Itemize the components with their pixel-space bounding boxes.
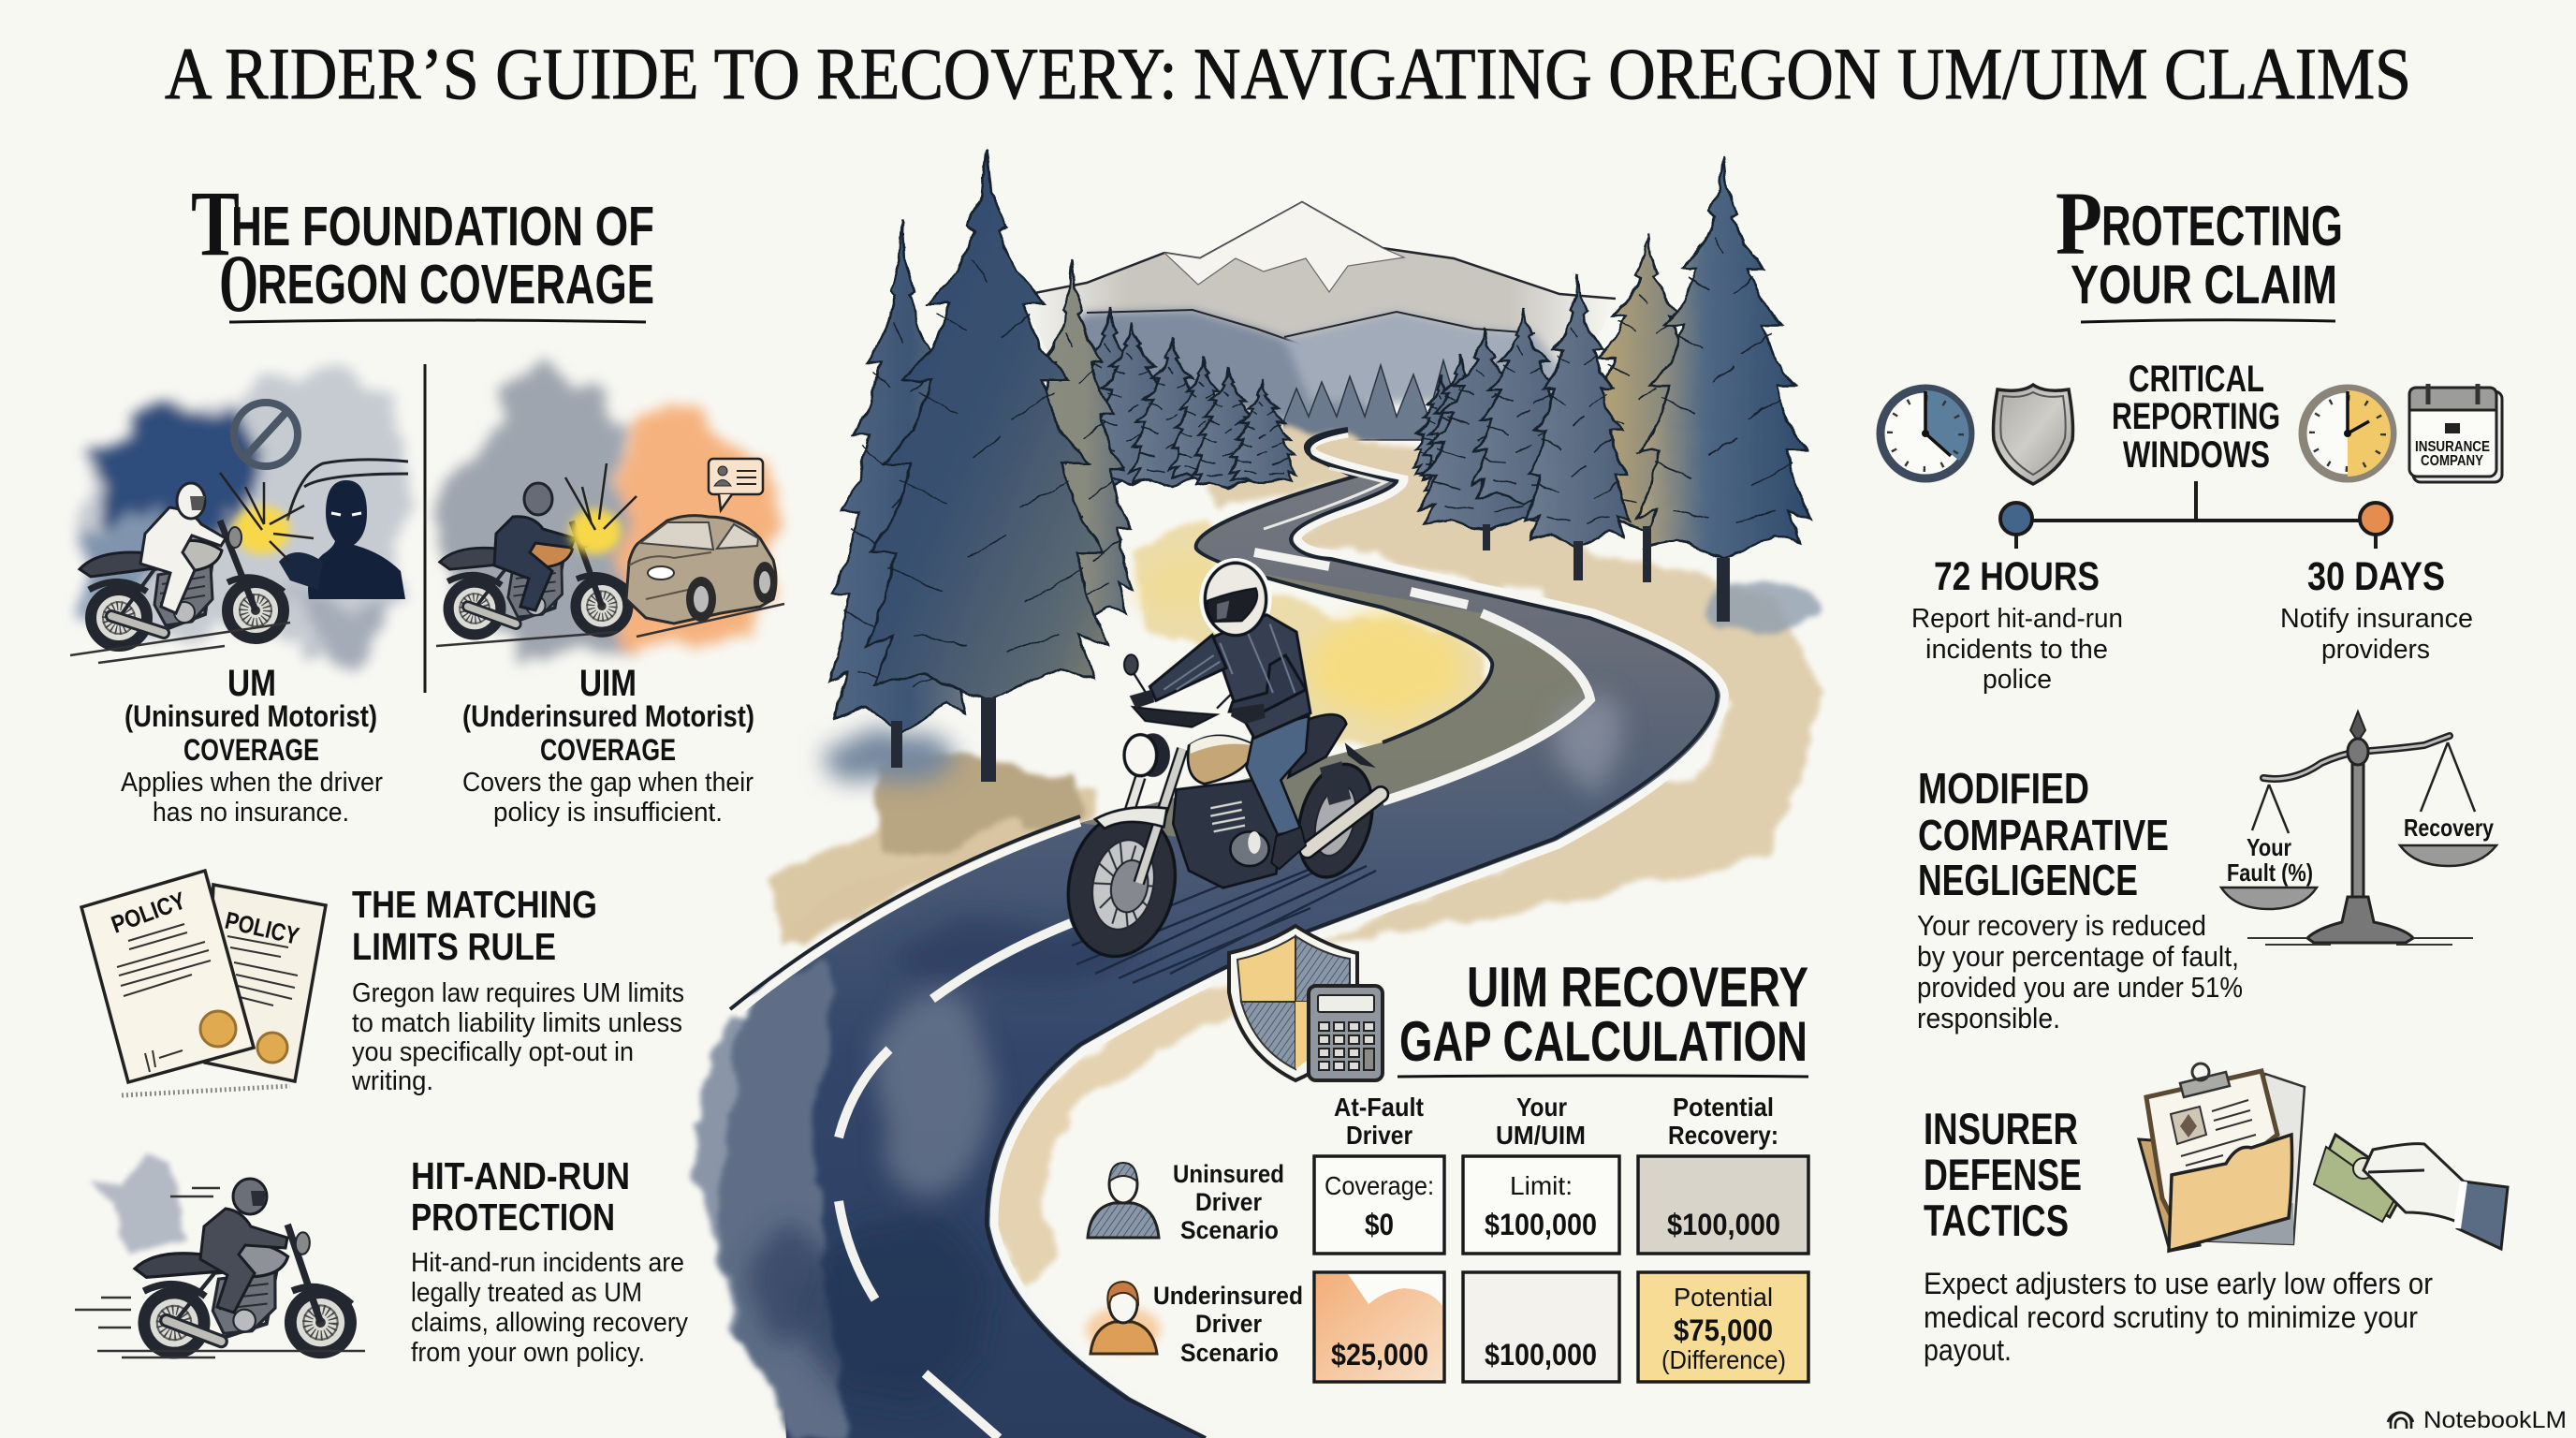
cell: coverage $0 — [1314, 1156, 1444, 1254]
label: uninsured driver — [1173, 1160, 1284, 1244]
icon: policy documents: POLICY — [108, 886, 189, 939]
block: matching limits rule: Gregon law requires UM limits — [352, 978, 684, 1008]
block: insurer defense tactics: payout. — [1924, 1333, 2012, 1367]
label: underinsured driver: Scenario — [1180, 1339, 1279, 1367]
UIM description: UIM — [579, 663, 637, 704]
icon: scales of justice — [2221, 712, 2496, 945]
panel: protecting your claim — [1881, 173, 2567, 1433]
block: 72 hours: 72 HOURS — [1934, 554, 2100, 599]
block: matching limits rule: THE MATCHING — [352, 883, 597, 926]
cell: potential $75,000 difference: Potential — [1674, 1283, 1773, 1312]
UIM description — [462, 663, 754, 828]
timeline — [2000, 481, 2392, 549]
block: 30 days: Notify insurance — [2280, 604, 2473, 634]
NotebookLM logo: NotebookLM — [2423, 1407, 2567, 1433]
pine trees — [829, 149, 1810, 733]
icon: clock 72 hours — [1881, 389, 1970, 478]
block: modified comparative negligence: by your percentage of fault, — [1917, 940, 2239, 973]
icon: hit-and-run motorcycle — [75, 1153, 365, 1362]
table column headers: At-Fault — [1334, 1093, 1424, 1122]
heading: UIM recovery gap: UIM RECOVERY — [1467, 956, 1808, 1019]
label: critical reporting windows — [2112, 359, 2280, 476]
UM description: COVERAGE — [183, 733, 319, 767]
block: modified comparative negligence — [1917, 764, 2243, 1034]
block: modified comparative negligence: Your recovery is reduced — [1917, 909, 2206, 942]
block: modified comparative negligence: provided you are under 51% — [1917, 971, 2243, 1004]
block: matching limits rule — [351, 883, 684, 1096]
cell: limit $100,000 — [1463, 1156, 1619, 1254]
UM description: Applies when the driver — [121, 768, 383, 798]
divider — [423, 364, 427, 693]
block: hit-and-run protection — [411, 1154, 688, 1368]
cell: limit $100,000: Limit: — [1510, 1171, 1573, 1200]
heading: protecting your claim: YOUR CLAIM — [2071, 255, 2337, 315]
cell: potential $75,000 difference: $75,000 — [1674, 1313, 1773, 1347]
block: hit-and-run protection: from your own policy. — [411, 1338, 645, 1368]
icon: insurance calendar: INSURANCE — [2415, 439, 2490, 455]
block: 72 hours: incidents to the — [1925, 635, 2108, 665]
UIM description: Covers the gap when their — [462, 768, 754, 798]
icon: scales of justice: Your — [2247, 833, 2291, 861]
cell: $25,000 — [1314, 1272, 1444, 1382]
block: insurer defense tactics: INSURER — [1924, 1104, 2078, 1153]
block: 72 hours: police — [1983, 665, 2052, 695]
icon: clipboard folder — [2139, 1064, 2305, 1251]
tree trunks — [891, 524, 1730, 782]
UM illustration — [70, 360, 408, 663]
UM description: UM — [227, 663, 276, 704]
block: modified comparative negligence: responsible. — [1917, 1002, 2060, 1034]
block: hit-and-run protection: legally treated as UM — [411, 1278, 642, 1308]
cell: potential $75,000 difference: (Difference) — [1661, 1345, 1786, 1374]
block: insurer defense tactics: medical record scrutiny to minimize your — [1924, 1300, 2418, 1334]
cell: coverage $0: $0 — [1365, 1208, 1394, 1241]
block: insurer defense tactics — [1924, 1104, 2433, 1367]
mountains — [1020, 202, 1616, 440]
block: insurer defense tactics: DEFENSE — [1924, 1150, 2082, 1199]
block: hit-and-run protection: Hit-and-run incidents are — [411, 1248, 684, 1278]
UIM illustration — [436, 374, 784, 655]
panel: UIM recovery gap calculation — [1086, 926, 1808, 1382]
label: critical reporting windows: REPORTING — [2112, 396, 2280, 437]
block: modified comparative negligence: MODIFIED — [1918, 764, 2089, 813]
block: modified comparative negligence: COMPARATIVE — [1918, 811, 2169, 859]
motorcyclist on road — [1055, 558, 1384, 966]
icon: hand offering money — [2314, 1135, 2508, 1249]
table column headers — [1334, 1093, 1778, 1150]
heading: foundation: O — [219, 239, 258, 330]
UIM description: (Underinsured Motorist) — [462, 699, 754, 733]
heading: protecting your claim: P — [2056, 173, 2102, 273]
block: matching limits rule: writing. — [351, 1066, 433, 1096]
block: hit-and-run protection: HIT-AND-RUN — [411, 1154, 630, 1197]
UM description — [121, 663, 383, 828]
ground washes — [772, 412, 1821, 1269]
heading: foundation: HE FOUNDATION OF — [231, 196, 654, 257]
block: modified comparative negligence: NEGLIGENCE — [1918, 856, 2138, 904]
central illustration: winding road scene — [686, 149, 1821, 1438]
label: uninsured driver: Scenario — [1180, 1216, 1279, 1244]
cell: $100,000 — [1463, 1272, 1619, 1382]
icon: policy documents — [81, 871, 326, 1095]
table column headers: UM/UIM — [1496, 1121, 1586, 1150]
table column headers: Driver — [1346, 1121, 1412, 1150]
block: 72 hours — [1911, 554, 2123, 695]
icon: insurance calendar — [2409, 384, 2502, 482]
row: uninsured driver scenario — [1088, 1156, 1808, 1254]
heading: protecting your claim: ROTECTING — [2101, 195, 2343, 257]
block: insurer defense tactics: Expect adjusters to use early low offers or — [1924, 1267, 2433, 1300]
icon: shield and calculator — [1229, 926, 1383, 1080]
UIM description: policy is insufficient. — [493, 798, 723, 828]
label: uninsured driver: Uninsured — [1173, 1160, 1284, 1188]
heading: foundation — [191, 171, 654, 330]
row: underinsured driver scenario — [1086, 1272, 1808, 1382]
cell: potential recovery $100,000 — [1638, 1156, 1808, 1254]
cell: potential $75,000 difference — [1638, 1272, 1808, 1382]
icon: uninsured driver — [1088, 1163, 1159, 1238]
yellow glow inside road curve — [822, 561, 1465, 785]
heading: protecting your claim — [2056, 173, 2343, 322]
panel: foundation of Oregon coverage — [70, 171, 784, 1368]
label: underinsured driver: Driver — [1195, 1310, 1262, 1338]
cell: $100,000: $100,000 — [1485, 1338, 1597, 1372]
UIM description: COVERAGE — [540, 733, 676, 767]
cell: potential recovery $100,000: $100,000 — [1667, 1208, 1780, 1241]
table column headers: Your — [1516, 1093, 1567, 1122]
heading: foundation: REGON COVERAGE — [257, 254, 654, 315]
block: matching limits rule: LIMITS RULE — [352, 925, 556, 968]
label: underinsured driver — [1153, 1282, 1303, 1367]
label: uninsured driver: Driver — [1195, 1188, 1262, 1216]
icon: police badge — [1994, 385, 2072, 484]
icon: scales of justice: Recovery — [2404, 814, 2494, 842]
table column headers: Recovery: — [1668, 1121, 1778, 1150]
block: matching limits rule: to match liability limits unless — [352, 1008, 682, 1038]
block: 30 days — [2280, 554, 2473, 665]
road — [686, 429, 1724, 1438]
icon: underinsured driver — [1086, 1282, 1161, 1354]
block: matching limits rule: you specifically opt-out in — [352, 1037, 634, 1067]
cell: $25,000: $25,000 — [1331, 1338, 1428, 1372]
block: 30 days: 30 DAYS — [2307, 554, 2445, 599]
label: critical reporting windows: CRITICAL — [2129, 359, 2264, 400]
cell: coverage $0: Coverage: — [1325, 1171, 1434, 1200]
block: hit-and-run protection: claims, allowing recovery — [411, 1308, 688, 1338]
icon: policy documents: POLICY — [223, 906, 301, 950]
block: 30 days: providers — [2321, 635, 2430, 665]
block: insurer defense tactics: TACTICS — [1924, 1196, 2069, 1245]
label: underinsured driver: Underinsured — [1153, 1282, 1303, 1310]
UM description: has no insurance. — [153, 798, 349, 828]
icon: clock 30 days — [2303, 389, 2393, 478]
heading: foundation: T — [191, 171, 240, 275]
block: 72 hours: Report hit-and-run — [1911, 604, 2123, 634]
table column headers: Potential — [1673, 1093, 1774, 1122]
label: critical reporting windows: WINDOWS — [2123, 434, 2270, 476]
heading: UIM recovery gap — [1398, 956, 1808, 1077]
icon: insurance calendar: COMPANY — [2421, 453, 2483, 469]
heading: UIM recovery gap: GAP CALCULATION — [1399, 1010, 1808, 1073]
UM description: (Uninsured Motorist) — [124, 699, 377, 733]
cell: limit $100,000: $100,000 — [1485, 1208, 1597, 1241]
icon: scales of justice: Fault (%) — [2227, 858, 2313, 887]
block: hit-and-run protection: PROTECTION — [411, 1196, 615, 1239]
